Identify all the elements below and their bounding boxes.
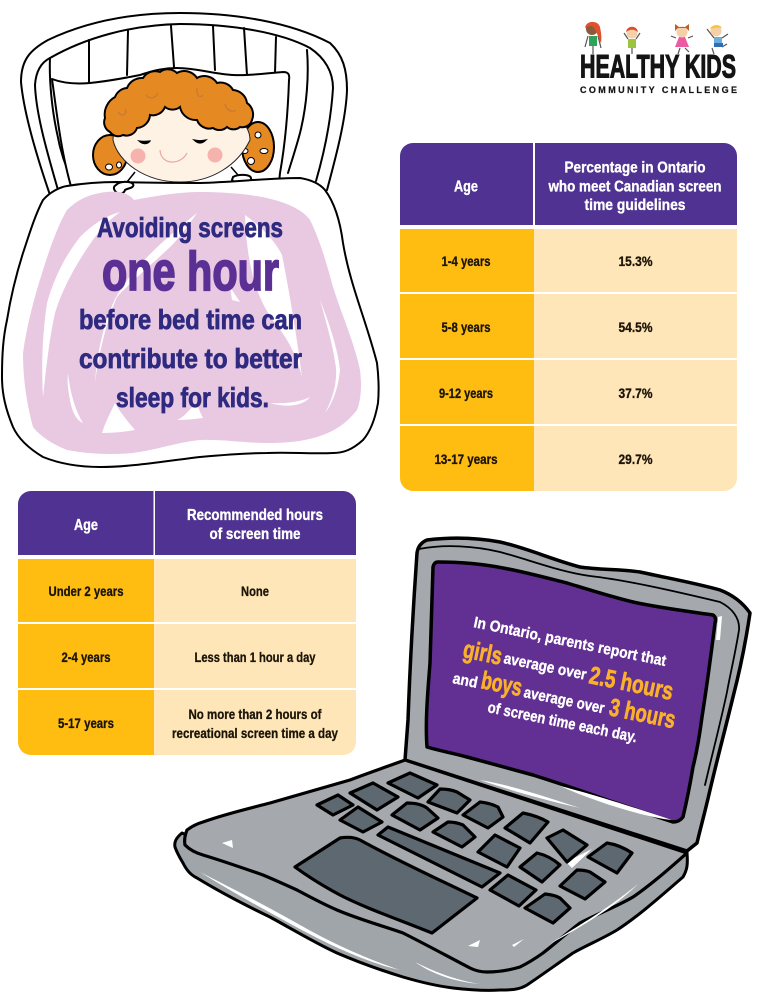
laptop base underside [175,833,687,990]
pillow [52,68,289,196]
row: 2-4 years: Less than 1 hour a day [194,649,316,665]
row: 1-4 years: 1-4 years [442,253,491,269]
screen message text [451,614,678,746]
row: 5-8 years [400,294,737,358]
row: under 2 years: Under 2 years [48,583,124,599]
row: 5-17 years: No more than 2 hours of [188,706,322,722]
keyboard keys [317,773,632,923]
table header row: Percentage in Ontario [564,160,706,176]
callout text: avoiding screens one hour: before bed time can [79,304,302,335]
hands on blanket [114,167,251,194]
hair curl marks [118,88,236,115]
screen message text: average over [502,650,588,684]
screen message text: average over [522,684,606,717]
laptop keyboard deck [185,760,687,972]
logo tagline: COMMUNITY CHALLENGE [580,85,737,95]
illustration: girl sleeping in bed [2,13,379,467]
face [113,100,250,182]
laptop trackpad [295,837,477,933]
row: 5-17 years: recreational screen time a day [172,725,338,741]
table header row: of screen time [210,526,301,543]
row: 9-12 years: 37.7% [618,385,653,401]
table: percentage meeting guidelines by age [400,143,737,491]
table header row: Age [454,178,478,196]
logo: Healthy Kids Community Challenge [580,22,737,95]
callout text: avoiding screens one hour: contribute to better [79,343,302,374]
row: 13-17 years: 13-17 years [434,451,498,467]
table header row: Age [74,517,98,534]
laptop lid [405,538,750,851]
screen message text: 2.5 hours [587,661,676,706]
table header row: time guidelines [584,197,686,214]
lid inner edge line [419,546,739,785]
blanket highlights [42,212,340,433]
row: 9-12 years: 9-12 years [439,385,493,401]
screen message text: 3 hours [607,693,678,734]
callout text: avoiding screens one hour: sleep for kids. [116,382,269,413]
row: 5-8 years: 5-8 years [442,319,491,335]
hair side curls [93,122,274,175]
laptop screen [426,562,716,822]
table header row: who meet Canadian screen [548,178,722,196]
row: 2-4 years: 2-4 years [62,649,111,665]
screen message text: In Ontario, parents report that [472,614,668,670]
table header row [400,143,737,225]
screen message text: of screen time each day. [486,699,639,746]
row: under 2 years: None [241,583,269,599]
row: 5-17 years [18,690,356,755]
row: 13-17 years: 29.7% [618,451,653,467]
deck highlights [222,780,638,947]
table header row [18,491,356,555]
logo kid figures [585,22,728,54]
cheeks and facial features [130,140,222,164]
row: 5-17 years: 5-17 years [58,715,114,731]
underside highlights [200,872,480,984]
screen message text: and [451,670,479,692]
table header row: Recommended hours [187,507,323,524]
lid highlights [560,616,722,820]
screen message text: boys [479,666,525,702]
illustration: laptop [175,538,750,990]
row: 1-4 years [400,229,737,292]
table: recommended hours of screen time [18,491,356,755]
row: 13-17 years [400,426,737,491]
row: 2-4 years [18,624,356,688]
blanket [2,178,379,467]
row: 5-8 years: 54.5% [618,319,653,335]
callout text: avoiding screens one hour: one hour [102,240,279,302]
row: 1-4 years: 15.3% [618,253,653,269]
bed headboard [21,13,347,195]
row: 9-12 years [400,360,737,424]
hair top [104,69,253,136]
callout text: avoiding screens one hour [79,212,302,413]
callout text: avoiding screens one hour: Avoiding screens [97,212,283,243]
screen message text: girls [461,635,505,671]
blanket hand overlap [114,182,133,194]
blanket scribble fill [23,192,361,454]
row: under 2 years [18,559,356,622]
